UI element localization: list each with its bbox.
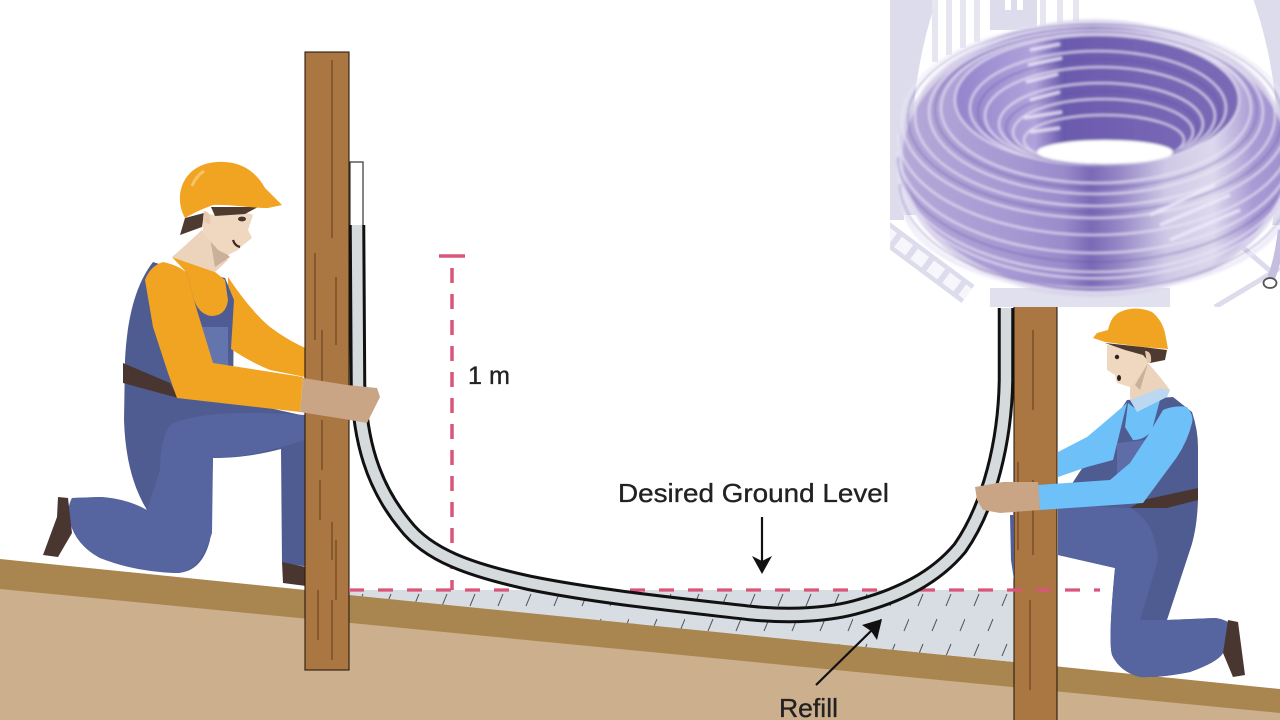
worker left: neck [172,230,230,272]
worker left: near arm [145,262,303,412]
worker right: near arm [1038,406,1192,510]
worker left: legs and overalls [43,262,310,586]
worker left: hand [300,378,380,423]
hard hat: left worker [180,162,282,218]
worker left: head [180,162,282,255]
worker right: far arm [1058,403,1127,477]
hard hat: right worker [1093,308,1168,349]
desired ground level dashed line [349,588,1100,592]
worker left: far arm [228,277,310,378]
tube: empty white end [350,162,363,226]
ground: soil [0,580,1280,720]
measurement: 1 m dashed height marker: 1 m [468,362,510,390]
worker right: belt [1130,488,1198,508]
arrow: to ground level [752,517,772,574]
boot: left worker back [43,497,72,557]
worker right: chest [1125,400,1160,440]
ground: sloping surface band [0,559,1280,713]
photo inset: coil of clear purple tubing [890,0,1280,307]
arrow: to refill [816,619,882,685]
pole: right [1014,300,1057,720]
worker right: hand [975,482,1040,513]
pole: left [305,52,349,670]
boot: right worker [1223,620,1245,677]
label: desired ground level: Desired Ground Level [618,478,889,508]
refill area [349,590,1014,662]
worker left: bib [172,257,234,366]
worker right: head [1093,308,1168,387]
thigh and knee highlight [68,413,305,573]
water tube [350,162,1006,615]
worker right: neck and collar [1130,363,1170,412]
tube end [1264,230,1280,288]
boot: left worker front [282,562,306,586]
worker right: sliver of leg behind pole [1010,515,1014,580]
overalls pocket: right worker [1117,440,1145,477]
coil body [898,20,1280,296]
coil centre hole [1037,140,1173,164]
inset background [890,0,1280,307]
highlights on the coil [1024,44,1240,240]
thigh and knee highlight [1058,505,1237,677]
worker right: legs and overalls [1058,397,1245,677]
worker left: belt [123,363,178,398]
